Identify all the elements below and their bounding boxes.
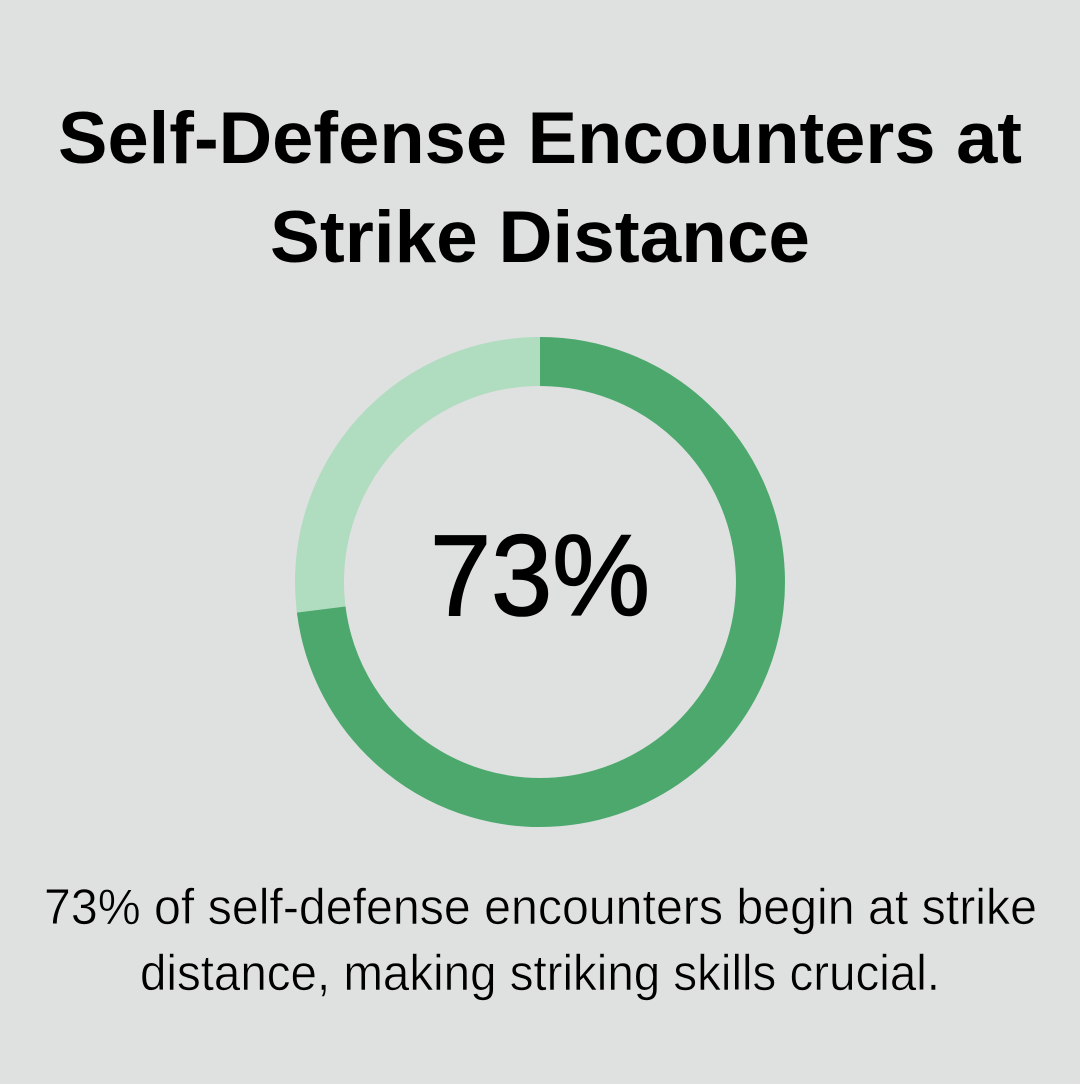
center value: 73% (430, 512, 650, 640)
73 percent segment (321, 362, 760, 802)
description text: distance, making striking skills crucial. (140, 945, 940, 1001)
title: Strike Distance (270, 197, 810, 278)
description text (44, 879, 1037, 1001)
description text: 73% of self-defense encounters begin at strike (44, 879, 1037, 935)
title (58, 98, 1022, 278)
remaining 27 percent segment (320, 362, 760, 802)
title: Self-Defense Encounters at (58, 98, 1022, 179)
donut chart: 73 percent (320, 362, 760, 802)
